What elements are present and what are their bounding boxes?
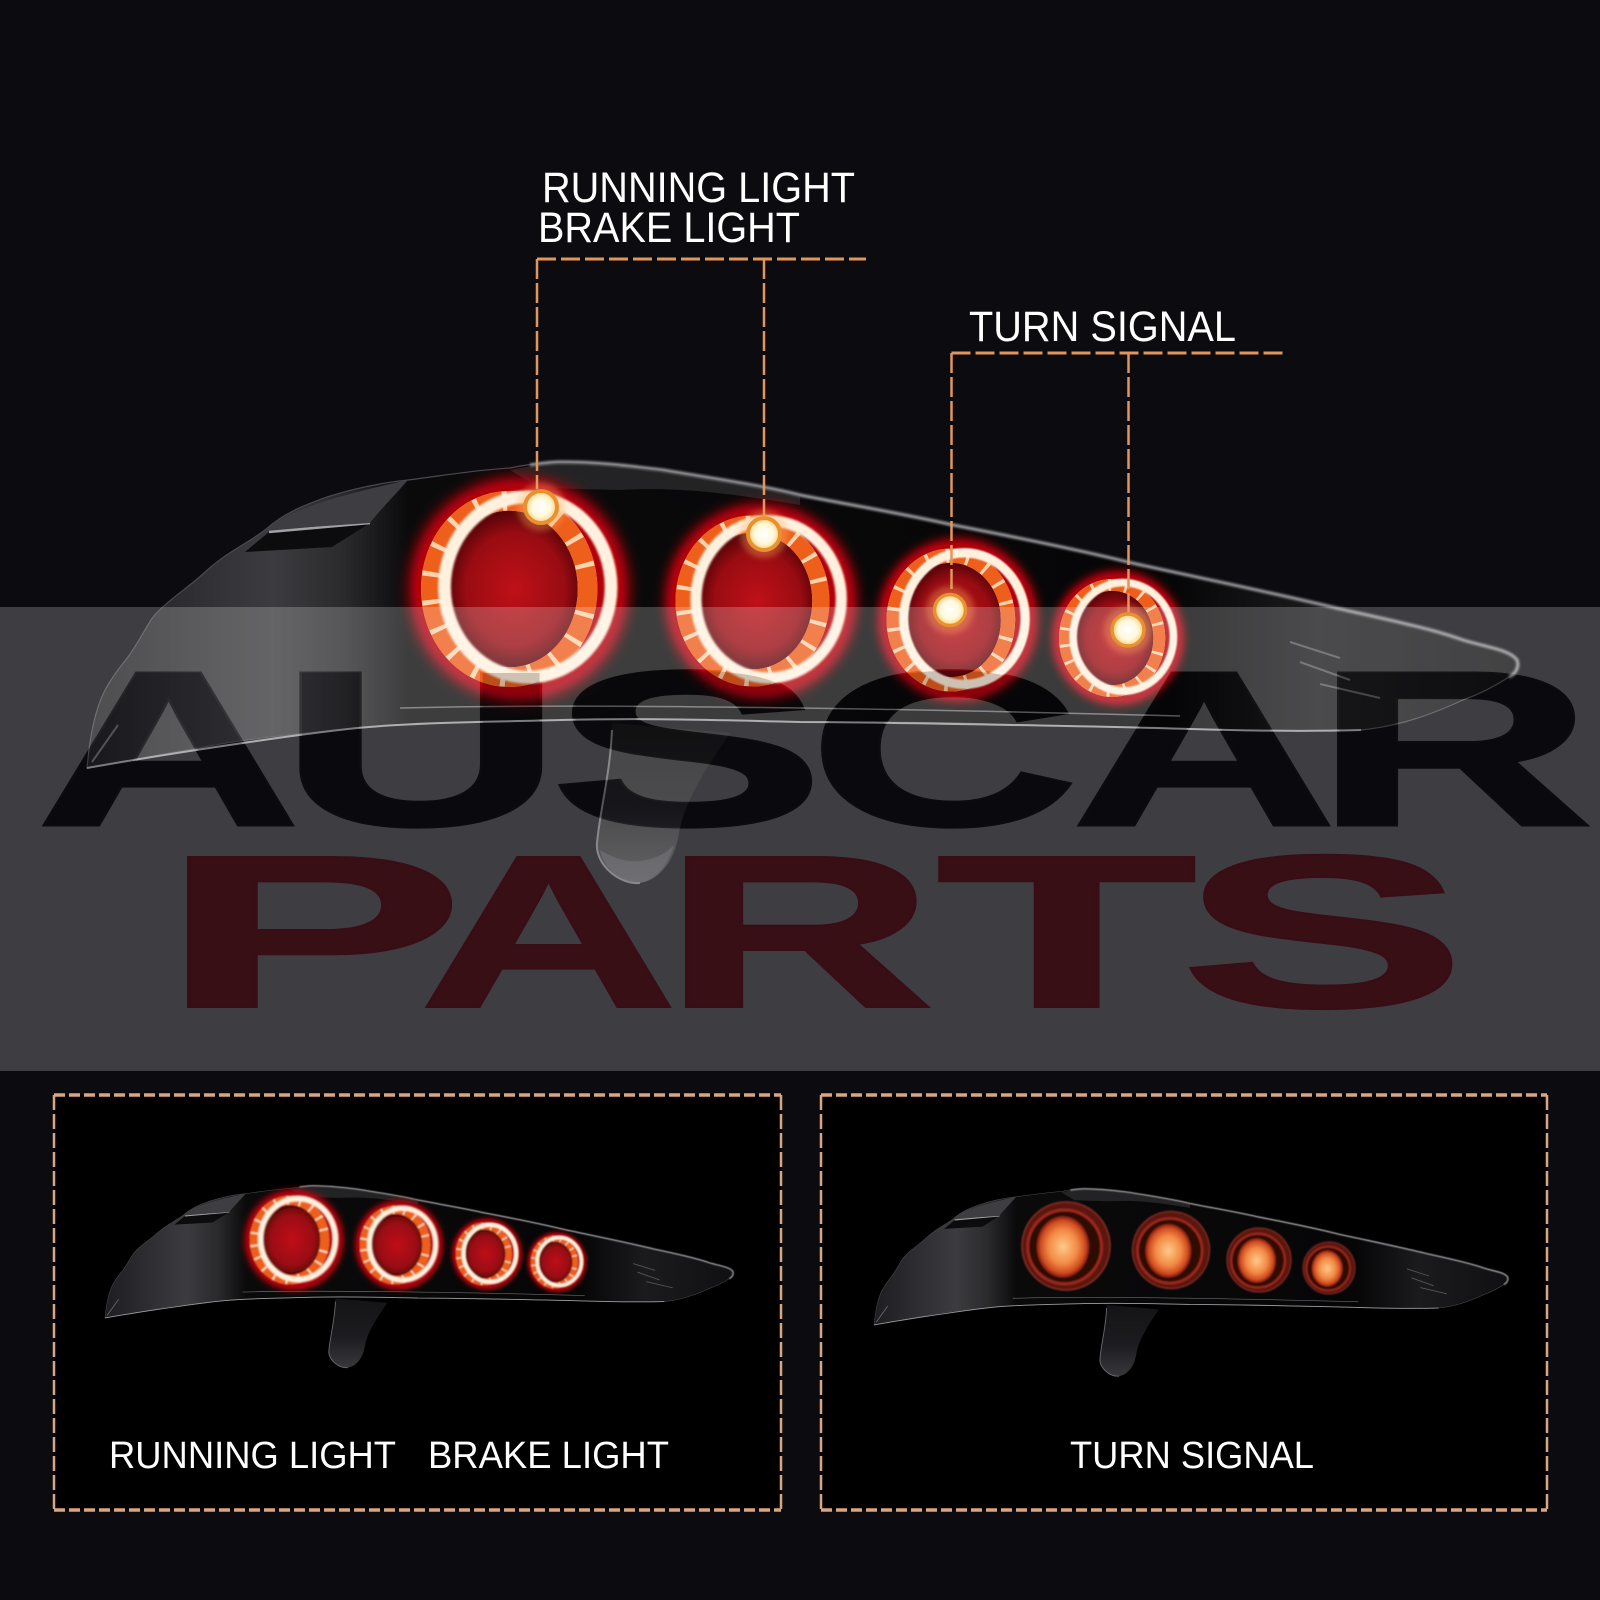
- caption: turn signal: TURN SIGNAL: [1070, 1435, 1314, 1477]
- leader lines: [537, 259, 866, 516]
- watermark: AUSCAR: U: [278, 625, 564, 872]
- caption: running light: RUNNING LIGHT: [109, 1435, 396, 1477]
- callout: turn signal: [926, 303, 1283, 654]
- watermark: PARTS: T: [935, 811, 1198, 1054]
- lamp ring 3: [878, 538, 1038, 702]
- lamp ring 1: [409, 477, 629, 701]
- bracket tip highlight: [600, 845, 674, 883]
- panel background: [54, 1095, 781, 1510]
- lamp housing: [87, 462, 1518, 883]
- marker dot 4: [1104, 606, 1152, 654]
- watermark: PARTS: P: [158, 810, 466, 1054]
- lamp ring 2: [665, 504, 857, 698]
- panel: running light and brake light: [54, 1095, 781, 1510]
- heading: running light: RUNNING LIGHT: [542, 164, 855, 212]
- small lamp: running and brake lit: [105, 1186, 733, 1368]
- panel background: [821, 1095, 1547, 1510]
- callout: running and brake light: [517, 164, 866, 558]
- watermark: AUSCAR: S: [550, 626, 825, 872]
- marker dot 2: [740, 510, 788, 558]
- watermark: AUSCAR: A: [36, 626, 301, 872]
- translucent watermark band with AUSCAR cut out: [0, 607, 1600, 1071]
- leader lines: [952, 353, 1283, 612]
- watermark: PARTS: S: [1179, 810, 1467, 1053]
- main tail light photo: [87, 462, 1518, 883]
- panel: turn signal: [821, 1095, 1547, 1510]
- watermark: AUSCAR: R: [1314, 625, 1594, 872]
- watermark: AUSCAR: A: [1071, 626, 1337, 872]
- watermark: PARTS: R: [661, 810, 936, 1053]
- small lamp: turn signal lit: [874, 1189, 1508, 1376]
- caption: brake light: BRAKE LIGHT: [428, 1435, 669, 1477]
- heading: turn signal: TURN SIGNAL: [969, 303, 1236, 351]
- watermark: PARTS: A: [418, 811, 679, 1054]
- watermark: AUSCAR: [36, 625, 1594, 872]
- marker dot 1: [517, 483, 565, 531]
- lamp ring 4: [1052, 571, 1184, 705]
- marker dot 3: [926, 586, 974, 634]
- heading: brake light: BRAKE LIGHT: [538, 204, 800, 252]
- watermark: AUSCAR: C: [808, 626, 1080, 872]
- watermark: PARTS: [158, 810, 1467, 1054]
